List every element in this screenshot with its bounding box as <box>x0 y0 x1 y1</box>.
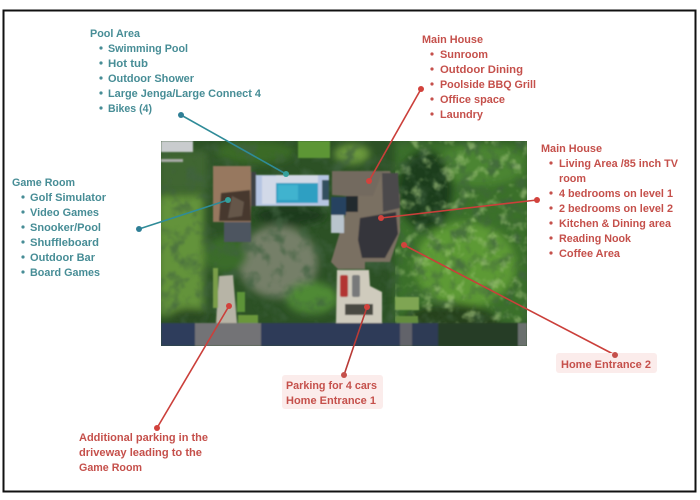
driveway <box>336 270 382 323</box>
highlight texture on the right tree canopy <box>395 141 527 326</box>
text block: main house upper: Poolside BBQ Grill <box>440 79 536 91</box>
text block: main house upper: Office space <box>440 94 505 106</box>
game room roof <box>213 166 251 222</box>
text block: main house right: Kitchen & Dining area <box>559 218 672 230</box>
text block: game room: Game Room <box>12 177 75 189</box>
road <box>161 323 195 346</box>
swimming pool <box>276 183 318 203</box>
text block: additional parking: Game Room <box>79 462 142 474</box>
aerial photo of the property <box>158 140 530 347</box>
callout: parking for 4 cars <box>282 372 383 409</box>
pool deck <box>256 175 329 206</box>
text block: main house right: Main House <box>541 143 602 155</box>
shadow texture over trees <box>161 141 526 323</box>
text block: main house right: Coffee Area <box>559 248 621 260</box>
text block: game room: Golf Simulator <box>30 192 107 204</box>
pointer: pool area <box>178 112 289 177</box>
text block: game room: Video Games <box>30 207 99 219</box>
pointer: parking <box>344 304 370 375</box>
pointer: home entrance 2 <box>401 242 615 355</box>
text block: pool area: Pool Area <box>90 28 141 40</box>
callout: parking for 4 cars: Parking for 4 cars <box>286 380 377 392</box>
text block: main house right <box>541 143 679 260</box>
text block: pool area: Outdoor Shower <box>108 73 195 85</box>
text block: main house upper <box>422 34 536 121</box>
text block: additional parking: driveway leading to the <box>79 447 202 459</box>
side driveway <box>216 275 237 323</box>
pointer: game room <box>136 197 231 232</box>
text block: pool area: Hot tub <box>108 58 148 70</box>
text block: game room: Board Games <box>30 267 100 279</box>
red car <box>340 275 348 297</box>
pointer: additional parking <box>154 303 232 431</box>
text block: pool area: Swimming Pool <box>108 43 188 55</box>
text block: main house upper: Laundry <box>440 109 484 121</box>
text block: main house right: room <box>559 173 586 185</box>
text block: game room: Snooker/Pool <box>30 222 101 234</box>
text block: pool area: Large Jenga/Large Connect 4 <box>108 88 262 100</box>
text block: pool area: Bikes (4) <box>108 103 152 115</box>
text block: main house upper: Sunroom <box>440 49 488 61</box>
grey car <box>352 275 360 297</box>
text block: additional parking: Additional parking in the <box>79 432 208 444</box>
text block: game room: Outdoor Bar <box>30 252 96 264</box>
main house roof <box>331 171 400 269</box>
callout: parking for 4 cars: Home Entrance 1 <box>286 395 376 407</box>
text block: main house upper: Outdoor Dining <box>440 64 523 76</box>
text block: main house right: Living Area /85 inch TV <box>559 158 679 170</box>
text block: main house right: Reading Nook <box>559 233 632 245</box>
text block: game room <box>12 177 107 279</box>
pointer: main house living area <box>378 197 540 221</box>
text block: additional parking <box>79 432 208 474</box>
callout: home entrance 2 <box>556 352 657 373</box>
pointer: main house sunroom <box>366 86 424 184</box>
neighbouring building <box>161 141 193 152</box>
text block: main house right: 4 bedrooms on level 1 <box>559 188 673 200</box>
text block: main house right: 2 bedrooms on level 2 <box>559 203 673 215</box>
text block: pool area <box>90 28 262 115</box>
text block: game room: Shuffleboard <box>30 237 99 249</box>
text block: main house upper: Main House <box>422 34 483 46</box>
callout: home entrance 2: Home Entrance 2 <box>561 359 651 371</box>
